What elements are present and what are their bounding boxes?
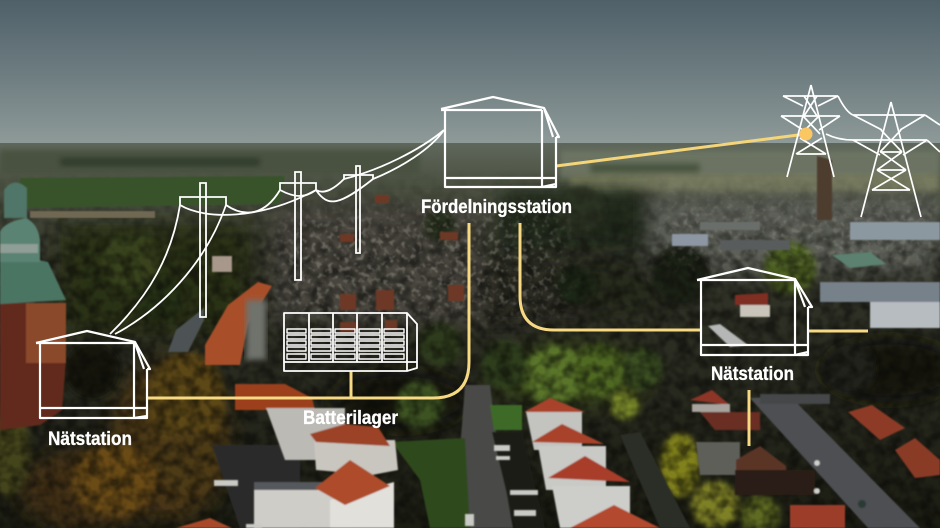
- road: [168, 308, 204, 352]
- mid-ground tones: [20, 190, 940, 528]
- icon: utility poles and overhead wires: [110, 130, 444, 334]
- line: substation to right grid station: [520, 223, 701, 330]
- icon: Fördelningsstation building: [441, 97, 559, 187]
- industrial buildings: [672, 222, 940, 347]
- terraced orange roofs: [205, 282, 272, 365]
- pole 3: [344, 166, 373, 253]
- field path: [30, 211, 155, 218]
- pole 2: [280, 172, 316, 280]
- line: battery storage connection: [350, 371, 352, 398]
- wires: [110, 205, 226, 334]
- line: right grid station stub east: [808, 330, 868, 332]
- label: Nätstation right: Nätstation: [711, 363, 794, 385]
- central road and lawn: [212, 385, 920, 528]
- land base: [0, 143, 940, 528]
- label: Batterilager: Batterilager: [303, 407, 398, 429]
- connection dot: [800, 128, 812, 140]
- sky: [0, 0, 940, 146]
- texture: photo grain over foliage and village: [0, 170, 940, 528]
- icon: Nätstation building left: [36, 331, 150, 418]
- texture: rooftops of the industrial area: [656, 195, 936, 270]
- carports: [246, 300, 266, 360]
- row houses center-right: [524, 398, 660, 528]
- foliage blobs: [0, 186, 876, 528]
- line: substation to left grid station: [148, 223, 469, 398]
- parked cars: [214, 445, 538, 528]
- icon: Nätstation building right: [697, 268, 812, 355]
- church tower: [0, 182, 66, 430]
- battery modules: [287, 329, 404, 359]
- icon: pylon left: [781, 85, 940, 177]
- distant countryside: [0, 150, 940, 193]
- pole 1: [180, 183, 226, 317]
- line: substation to pylon: [556, 134, 806, 166]
- texture: light rooftops of the village: [272, 204, 570, 327]
- label: Fördelningsstation: Fördelningsstation: [421, 196, 572, 218]
- silo: [817, 156, 832, 220]
- line: right grid station stub south: [748, 390, 750, 446]
- label: Nätstation left: Nätstation: [48, 428, 132, 450]
- icon: battery storage: [284, 313, 417, 371]
- village rooftops: [212, 195, 464, 332]
- yellow power lines: [148, 134, 868, 446]
- apartment buildings left: [176, 384, 398, 528]
- green field: [20, 176, 285, 208]
- icon: pylon right: [853, 102, 927, 217]
- houses right: [690, 390, 940, 528]
